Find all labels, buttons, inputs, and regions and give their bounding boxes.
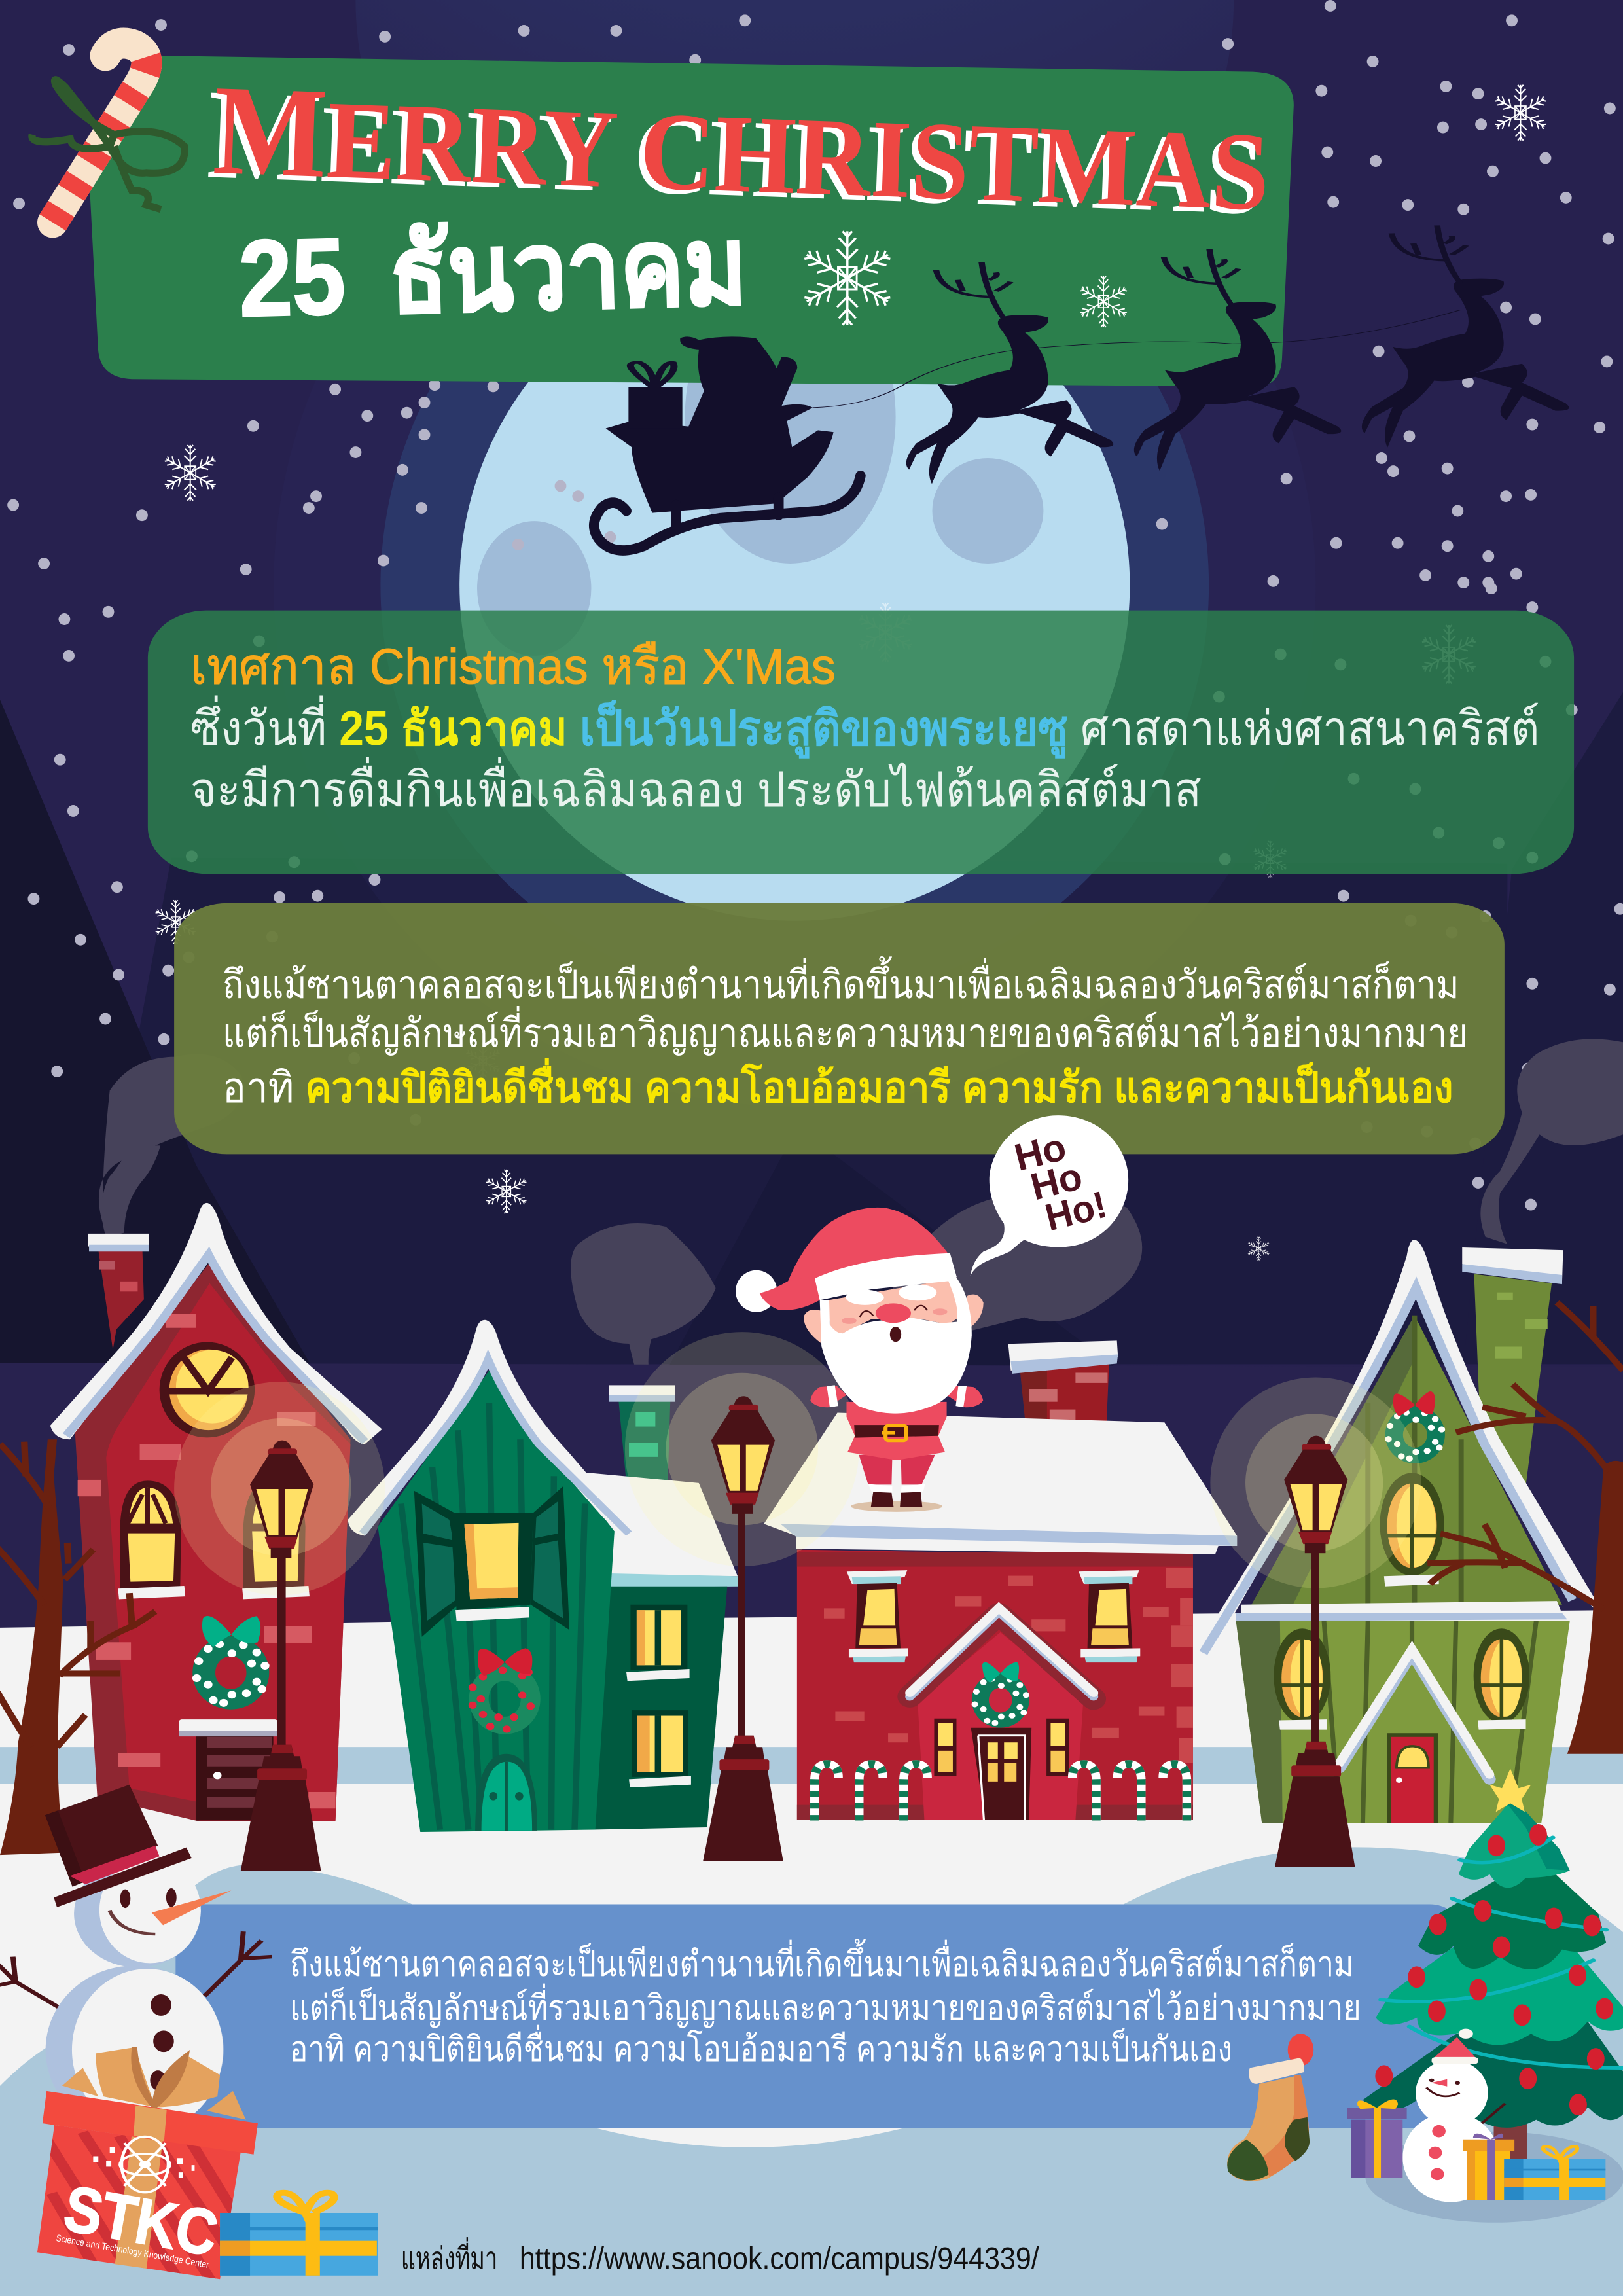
snowman arms xyxy=(0,1931,272,2020)
eyes and smile xyxy=(110,1888,177,1934)
roof xyxy=(50,1203,382,1444)
source credit: https://www.sanook.com/campus/944339/ xyxy=(520,2240,1040,2275)
door xyxy=(971,1728,1031,1820)
annex windows xyxy=(626,1605,691,1787)
olive house xyxy=(1197,1240,1598,1823)
panel: Santa Claus meaning xyxy=(174,903,1505,1154)
door roof xyxy=(1340,1653,1489,1779)
second tier xyxy=(1418,1871,1606,1969)
smoke chimney stem xyxy=(101,1145,160,1238)
lamp post 1 xyxy=(241,1441,321,1871)
dark mountains xyxy=(0,692,1623,1385)
beard xyxy=(820,1276,972,1414)
ornaments xyxy=(1375,1824,1613,2115)
atom logo xyxy=(93,2136,194,2193)
olive wreath xyxy=(1389,1391,1442,1458)
entrance gable xyxy=(910,1608,1094,1820)
box body xyxy=(37,2125,241,2279)
bubble shape xyxy=(971,1115,1128,1276)
trunk xyxy=(1493,2107,1527,2164)
main wall xyxy=(378,1371,615,1832)
lower body xyxy=(46,1965,224,2134)
lamp post 3 xyxy=(1275,1436,1355,1867)
intro heading: เทศกาล Christmas หรือ X'Mas xyxy=(190,639,836,694)
candy canes xyxy=(815,1764,1186,1820)
olive chimney xyxy=(1462,1247,1563,1485)
belt xyxy=(854,1425,939,1441)
title banner xyxy=(88,56,1294,386)
porch xyxy=(179,1719,277,1820)
left bare tree xyxy=(0,1439,155,1855)
arms xyxy=(810,1385,983,1407)
red door xyxy=(1387,1733,1438,1823)
window left xyxy=(847,1570,908,1662)
lowest tier xyxy=(1363,1985,1623,2128)
speech bubble xyxy=(971,1115,1128,1276)
Santa Claus xyxy=(736,1208,984,1512)
source credit: แหล่งที่มา xyxy=(401,2236,497,2275)
green wreath xyxy=(197,1616,265,1703)
eyebrows xyxy=(846,1284,936,1305)
tree shadow xyxy=(1365,2132,1623,2223)
wall xyxy=(75,1263,350,1821)
night sky background xyxy=(0,0,1623,1624)
snowflakes xyxy=(105,85,1548,1261)
pompom xyxy=(736,1270,777,1312)
yellow gift xyxy=(1463,2134,1514,2200)
sky glow above moon xyxy=(355,0,1234,380)
meaning line 1: ถึงแม้ซานตาคลอสจะเป็นเพียงตำนานที่เกิดขึ้นมาเพื่อเฉลิมฉลองวันคริสต์มาสก็ตาม xyxy=(223,956,1459,1007)
left house xyxy=(50,1145,382,1821)
ho ho ho text: Ho! xyxy=(1041,1183,1111,1239)
hat brim xyxy=(815,1253,957,1300)
ho ho ho text: Ho xyxy=(1026,1155,1086,1208)
logo tagline: Science and Technology Knowledge Center xyxy=(55,2233,210,2270)
gift box with STKC logo xyxy=(37,2047,258,2283)
sleigh and reindeer silhouettes xyxy=(594,225,1569,550)
wall xyxy=(797,1550,1193,1820)
note line 1: ถึงแม้ซานตาคลอสจะเป็นเพียงตำนานที่เกิดขึ้นมาเพื่อเฉลิมฉลองวันคริสต์มาสก็ตาม xyxy=(290,1939,1354,1984)
blue snow hills xyxy=(0,1847,1623,2296)
sleigh gift xyxy=(628,363,683,428)
roof xyxy=(348,1320,635,1537)
main roof xyxy=(1197,1240,1598,1656)
carrot nose xyxy=(152,1890,232,1925)
green door xyxy=(475,1754,537,1831)
moon xyxy=(459,250,1130,921)
panel: Christmas intro xyxy=(148,611,1574,874)
brick chimney xyxy=(1008,1340,1118,1422)
date: 25 December: 25 ธันวาคม xyxy=(238,206,748,340)
center red house xyxy=(764,1340,1237,1820)
santa coat xyxy=(846,1402,947,1460)
window right xyxy=(1079,1570,1140,1662)
small snowman xyxy=(1402,2029,1505,2202)
smoke xyxy=(99,1039,1623,1385)
upper arched window xyxy=(1380,1473,1444,1587)
meaning line 2: แต่ก็เป็นสัญลักษณ์ที่รวมเอาวิญญาณและความหมายของคริสต์มาสไว้อย่างมากมาย xyxy=(223,1006,1468,1056)
ribbon bow xyxy=(62,2047,246,2120)
intro line 2: ซึ่งวันที่ 25 ธันวาคม เป็นวันประสูติของพระเยซู ศาสดาแห่งศาสนาคริสต์ xyxy=(190,695,1540,759)
garlands xyxy=(1381,1837,1623,2068)
hat xyxy=(760,1208,948,1310)
arched window left xyxy=(118,1480,185,1599)
reins xyxy=(813,310,1460,408)
logo wordmark: STKC xyxy=(59,2172,223,2269)
arched window right xyxy=(242,1480,310,1599)
snowy ground xyxy=(0,1610,1623,2296)
face xyxy=(828,1280,960,1334)
moon halos xyxy=(274,64,1315,1107)
source credit xyxy=(401,2236,1040,2275)
lid xyxy=(43,2091,258,2155)
sleigh runner xyxy=(594,476,861,550)
ears xyxy=(804,1295,984,1344)
purple gift xyxy=(1347,2100,1407,2178)
lower window right xyxy=(1474,1628,1529,1730)
santa and sleigh xyxy=(606,336,834,513)
entrance wreath xyxy=(975,1662,1026,1723)
dark floor xyxy=(797,1805,1193,1820)
lamp post 2 xyxy=(703,1396,783,1861)
upper wall xyxy=(1251,1316,1562,1605)
stocking xyxy=(1227,2034,1313,2181)
candy cane xyxy=(32,43,185,223)
reindeer 1 xyxy=(906,262,1113,484)
green chimney xyxy=(609,1385,675,1483)
snowman left xyxy=(0,1785,272,2134)
banner snowflakes xyxy=(802,231,1128,327)
intro line 3: จะมีการดื่มกินเพื่อเฉลิมฉลอง ประดับไฟต้นคลิสต์มาส xyxy=(190,757,1202,817)
bricks xyxy=(78,1314,336,1808)
note line 3: อาทิ ความปิติยินดีชื่นชม ความโอบอ้อมอารี ความรัก และความเป็นกันเอง xyxy=(290,2024,1232,2069)
lamp glows xyxy=(174,1332,1421,1596)
falling snow dots xyxy=(13,6,1620,1205)
top hat xyxy=(45,1785,192,1907)
lower wall xyxy=(1236,1621,1570,1823)
nose and eyes xyxy=(842,1303,948,1342)
right bare tree xyxy=(1427,1302,1623,1754)
ho ho ho text: Ho xyxy=(1010,1126,1071,1179)
green house xyxy=(348,1320,738,1832)
shutter window xyxy=(414,1486,569,1637)
lower window left xyxy=(1274,1628,1330,1730)
meaning line 3: อาทิ ความปิติยินดีชื่นชม ความโอบอ้อมอารี ความรัก และความเป็นกันเอง xyxy=(223,1058,1454,1111)
christmas tree xyxy=(1347,1768,1623,2223)
note line 2: แต่ก็เป็นสัญลักษณ์ที่รวมเอาวิญญาณและความหมายของคริสต์มาสไว้อย่างมากมาย xyxy=(290,1983,1361,2028)
title: Merry Christmas: MERRY CHRISTMAS xyxy=(211,58,1272,238)
red wreath xyxy=(473,1648,532,1729)
santa legs xyxy=(851,1454,942,1512)
annex wall xyxy=(593,1587,727,1830)
vertical ribbon xyxy=(115,2106,167,2269)
reindeer 2 xyxy=(1134,249,1341,471)
roof xyxy=(764,1413,1237,1554)
title: Merry Christmas: MERRY CHRISTMAS xyxy=(205,62,1266,242)
stripes xyxy=(46,2132,249,2283)
star xyxy=(1489,1768,1531,1812)
side windows xyxy=(934,1719,1069,1776)
hat tail xyxy=(760,1276,820,1310)
ho ho ho text xyxy=(1010,1126,1111,1239)
third tier xyxy=(1376,1924,1623,2045)
blue gift xyxy=(1504,2146,1605,2200)
band of night behind village xyxy=(0,1363,1623,1628)
chimney xyxy=(88,1234,149,1350)
blue gift xyxy=(220,2193,378,2276)
reindeer 3 xyxy=(1362,225,1569,448)
head xyxy=(74,1857,201,1967)
wall bricks xyxy=(824,1568,1193,1763)
annex roof xyxy=(585,1473,738,1587)
round window xyxy=(160,1342,255,1437)
buttons xyxy=(150,1994,174,2090)
top tier xyxy=(1459,1803,1570,1888)
floor beam xyxy=(1236,1601,1567,1621)
panel: closing note xyxy=(175,1905,1456,2128)
